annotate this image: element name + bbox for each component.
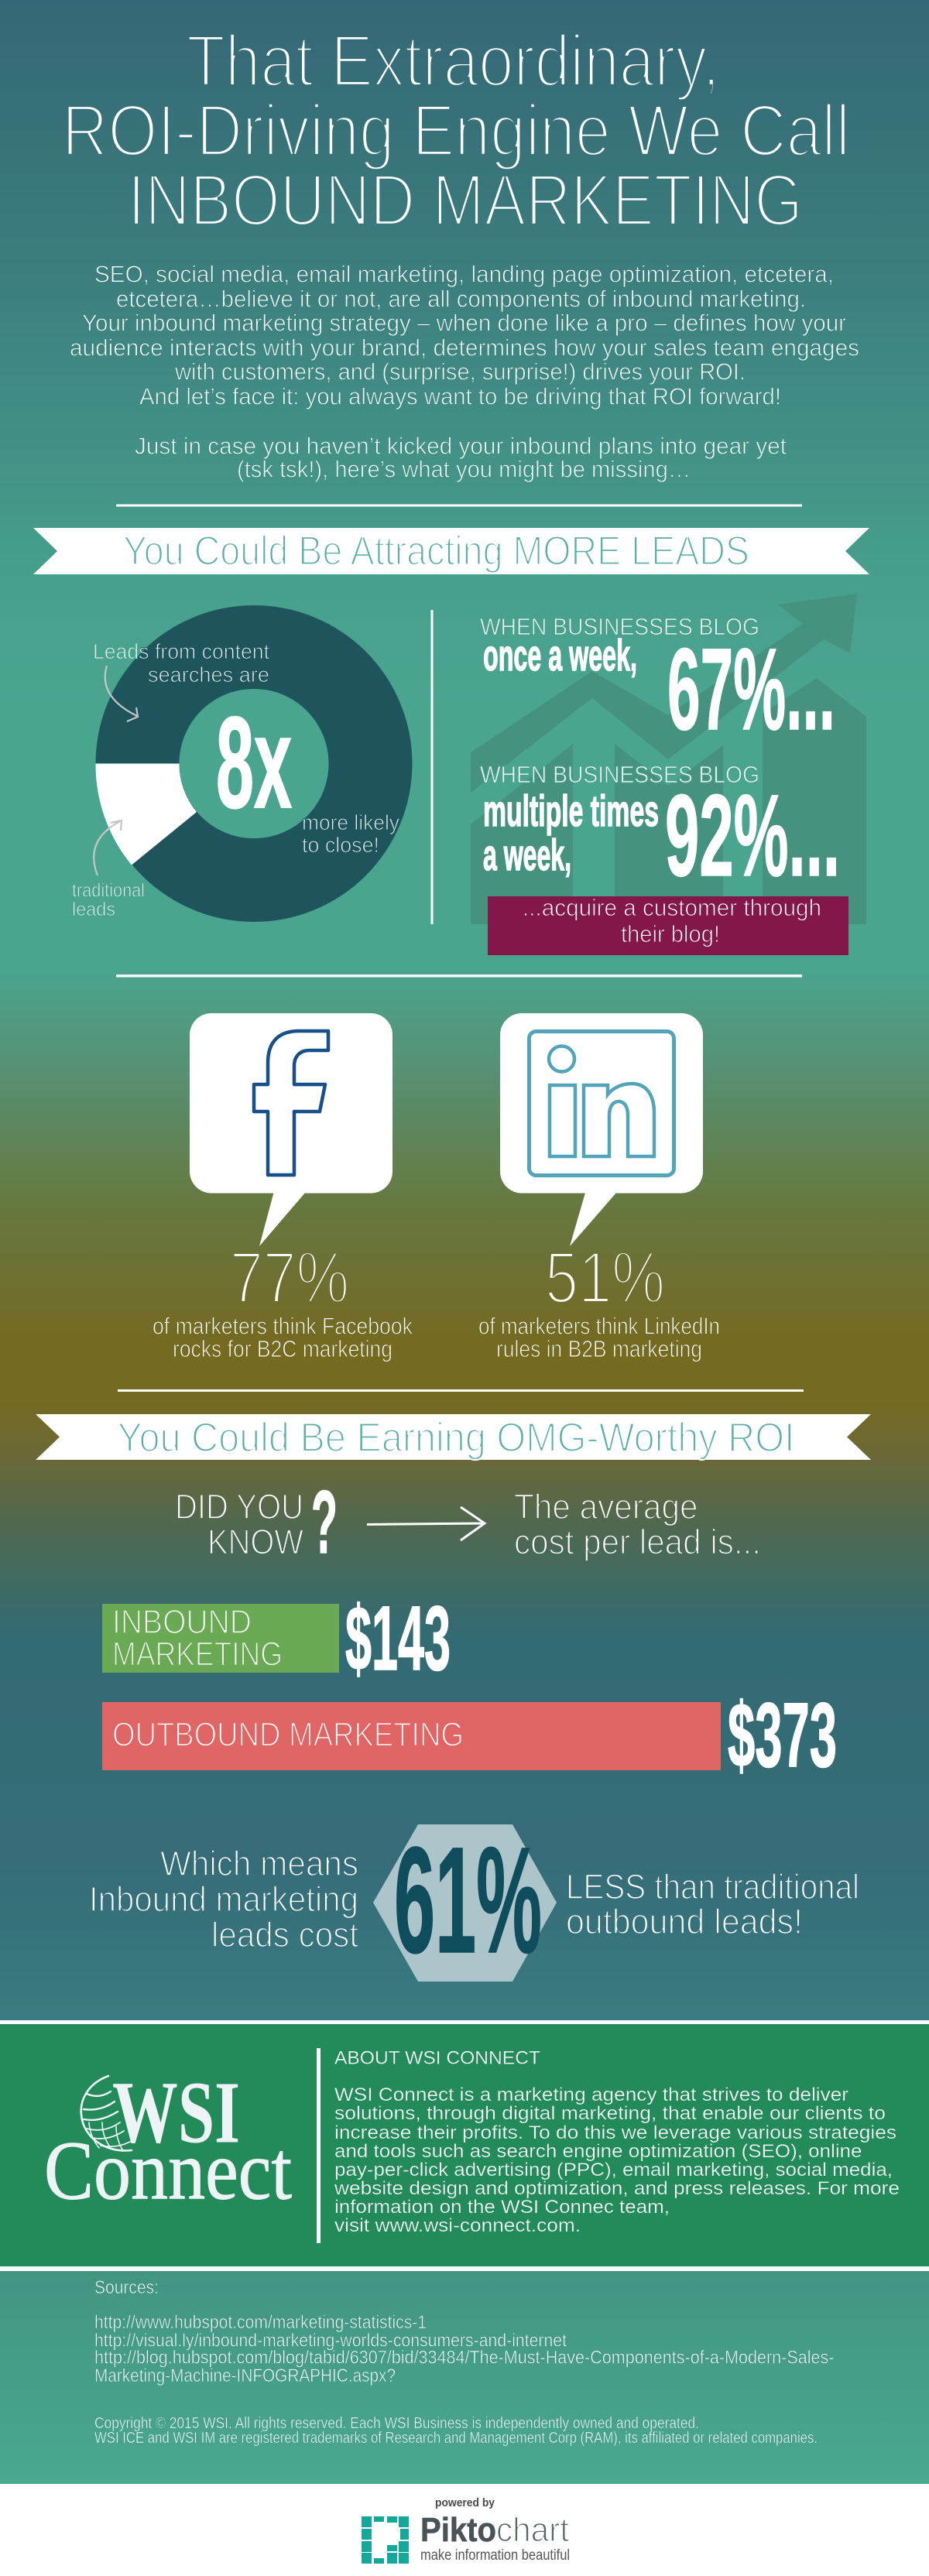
about body text: WSI Connect is a marketing agency that strives to deliver: [334, 2084, 848, 2105]
copyright notice: Copyright © 2015 WSI. All rights reserved. Each WSI Business is independently owned and operated.: [94, 2415, 699, 2432]
sources list: Sources:: [94, 2277, 159, 2298]
stat: facebook 77%: rocks for B2C marketing: [173, 1335, 393, 1362]
intro text block: And let’s face it: you always want to be driving that ROI forward!: [139, 382, 781, 410]
less than traditional text: [566, 1867, 859, 1941]
which means text: [89, 1844, 358, 1954]
footer: powered by Piktochart: powered by: [435, 2496, 495, 2509]
hexagon: 61%: 61%: [394, 1816, 542, 1985]
about heading: ABOUT WSI CONNECT: [334, 2048, 540, 2068]
about body text: visit www.wsi-connect.com.: [334, 2215, 581, 2236]
label: leads from content searches: [93, 639, 269, 687]
about body text: increase their profits. To do this we leverage various strategies: [334, 2122, 896, 2143]
label: traditional leads: leads: [72, 899, 115, 920]
blog stat: multiple times a week: [480, 761, 840, 900]
about body text: and tools such as search engine optimization (SEO), online: [334, 2141, 862, 2162]
panel: about WSI Connect: [0, 2024, 929, 2266]
panel: sources and copyright: [0, 2271, 929, 2484]
bar: inbound marketing $143: INBOUND: [112, 1603, 252, 1641]
intro text block: [70, 260, 859, 483]
footer: powered by Piktochart: make information beautiful: [420, 2547, 570, 2564]
label: leads from content searches: searches are: [148, 663, 269, 687]
icon: arrow to traditional leads: [94, 820, 122, 875]
hexagon: 61%: [373, 1816, 557, 1985]
about body text: [334, 2084, 900, 2236]
label: traditional leads: [72, 879, 145, 920]
footer: powered by Piktochart: [362, 2496, 570, 2564]
which means text: Which means: [160, 1844, 358, 1883]
intro text block: Your inbound marketing strategy – when done like a pro – defines how your: [82, 310, 846, 336]
callout: acquire a customer: ...acquire a customer through: [523, 894, 821, 921]
logo: WSI Connect: WSI: [112, 2064, 240, 2161]
about body text: information on the WSI Connec team,: [334, 2197, 670, 2218]
icon: facebook speech bubble: [190, 1013, 393, 1246]
blog stat: multiple times a week: multiple times: [483, 786, 659, 836]
text: ?: [311, 1473, 338, 1572]
title: [62, 20, 850, 242]
did you know: KNOW: [207, 1522, 303, 1562]
intro text block: with customers, and (surprise, surprise!) drives your ROI.: [174, 358, 746, 385]
intro text block: (tsk tsk!), here’s what you might be missing…: [237, 455, 691, 483]
title: INBOUND MARKETING: [128, 159, 803, 242]
about body text: solutions, through digital marketing, that enable our clients to: [334, 2103, 886, 2124]
label: more likely to close: [302, 810, 399, 857]
sources list: http://blog.hubspot.com/blog/tabid/6307/bid/33484/The-Must-Have-Components-of-a-Modern-Sales-: [94, 2347, 835, 2369]
logo: WSI Connect: [44, 2064, 292, 2217]
intro text block: audience interacts with your brand, determines how your sales team engages: [70, 334, 859, 361]
stat: linkedin 51%: of marketers think LinkedIn: [478, 1313, 720, 1339]
label: leads from content searches: Leads from content: [93, 639, 269, 663]
ribbon heading: more leads: You Could Be Attracting MORE LEADS: [123, 528, 749, 574]
average cost per lead text: The average: [514, 1487, 698, 1526]
sources list: http://visual.ly/inbound-marketing-worlds-consumers-and-internet: [94, 2330, 567, 2352]
average cost per lead text: [514, 1487, 761, 1562]
blog stat: once a week: [480, 613, 835, 754]
title: That Extraordinary,: [187, 20, 720, 102]
bar: outbound marketing $373: $373: [728, 1684, 837, 1786]
stat: linkedin 51%: rules in B2B marketing: [496, 1335, 702, 1362]
stat: 8x: 8x: [216, 690, 292, 835]
sources list: [94, 2277, 835, 2386]
footer: powered by Piktochart: chart: [496, 2511, 569, 2549]
stat: linkedin 51%: 51%: [545, 1237, 665, 1319]
did you know: DID YOU: [175, 1487, 303, 1526]
ribbon heading: OMG-worthy ROI: You Could Be Earning OMG-Worthy ROI: [118, 1415, 794, 1461]
blog stat: once a week: once a week,: [483, 631, 637, 680]
intro text block: SEO, social media, email marketing, landing page optimization, etcetera,: [94, 260, 834, 288]
which means text: Inbound marketing: [89, 1879, 358, 1919]
icon: Piktochart logo: [362, 2516, 409, 2564]
label: more likely to close: more likely: [302, 810, 399, 834]
intro text block: etcetera…believe it or not, are all components of inbound marketing.: [116, 285, 806, 313]
bar: inbound marketing $143: MARKETING: [112, 1635, 283, 1673]
less than traditional text: LESS than traditional: [566, 1867, 859, 1906]
page background gradient: [0, 0, 929, 2020]
donut chart: 8x leads: [72, 605, 412, 922]
icon: arrow to content leads: [105, 666, 138, 721]
icon: linkedin speech bubble: [500, 1013, 703, 1246]
copyright notice: [94, 2415, 818, 2447]
blog stat: multiple times a week: WHEN BUSINESSES BLOG: [480, 761, 759, 788]
sources list: Marketing-Machine-INFOGRAPHIC.aspx?: [94, 2365, 396, 2386]
sources list: http://www.hubspot.com/marketing-statistics-1: [94, 2312, 427, 2333]
stat: linkedin 51%: [478, 1237, 720, 1362]
bar: outbound marketing $373: [102, 1684, 837, 1786]
did you know: [175, 1473, 338, 1572]
stat: facebook 77%: [153, 1237, 413, 1362]
label: more likely to close: to close!: [302, 833, 379, 857]
label: traditional leads: traditional: [72, 879, 145, 901]
icon: growth chart watermark: [471, 594, 866, 924]
intro text block: Just in case you haven’t kicked your inbound plans into gear yet: [135, 432, 787, 460]
stat: facebook 77%: 77%: [230, 1237, 349, 1319]
callout: acquire a customer: [488, 894, 848, 955]
logo: WSI Connect: Connect: [44, 2126, 292, 2217]
callout: acquire a customer: their blog!: [621, 920, 720, 947]
bar: outbound marketing $373: OUTBOUND MARKETING: [112, 1715, 464, 1754]
less than traditional text: outbound leads!: [566, 1902, 803, 1941]
blog stat: multiple times a week: a week,: [483, 831, 571, 880]
stat: facebook 77%: of marketers think Facebook: [153, 1313, 413, 1339]
icon: right arrow: [367, 1507, 485, 1540]
blog stat: once a week: WHEN BUSINESSES BLOG: [480, 613, 759, 640]
about body text: website design and optimization, and press releases. For more: [334, 2178, 900, 2199]
about body text: pay-per-click advertising (PPC), email marketing, social media,: [334, 2160, 893, 2180]
average cost per lead text: cost per lead is...: [514, 1522, 761, 1562]
bar: inbound marketing $143: [102, 1588, 451, 1690]
icon: globe: [81, 2076, 132, 2150]
which means text: leads cost: [211, 1915, 358, 1954]
bar: inbound marketing $143: $143: [345, 1588, 451, 1690]
wordmark: Pikto: [420, 2511, 496, 2549]
